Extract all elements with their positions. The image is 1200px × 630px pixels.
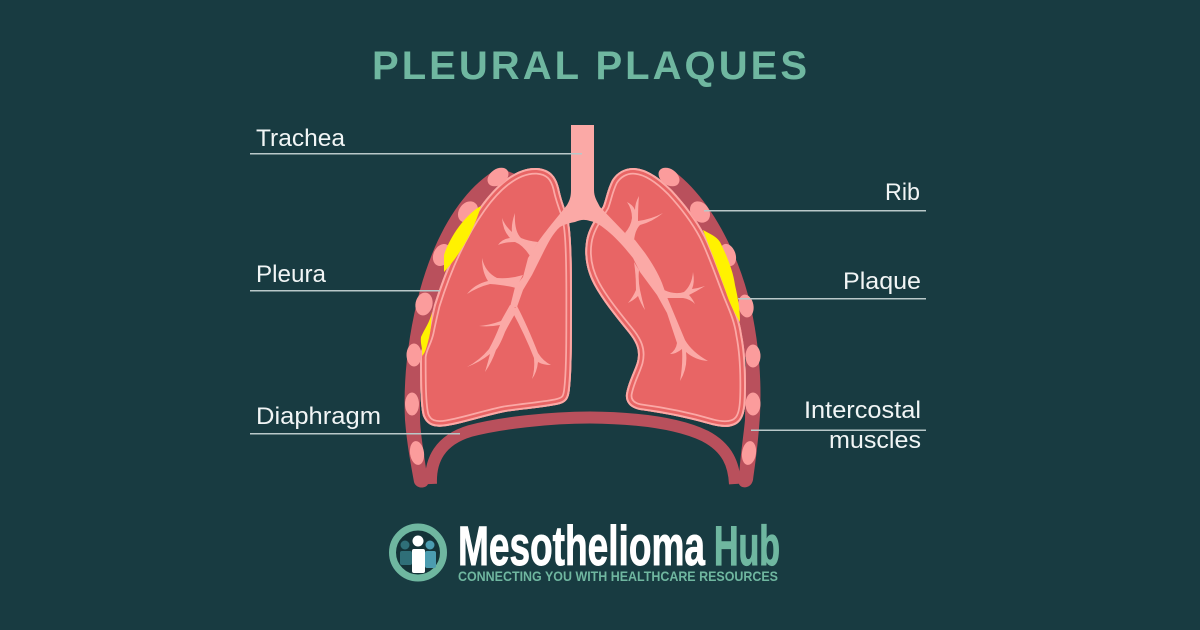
label: Intercostal muscles: Intercostal bbox=[804, 397, 921, 424]
label: Trachea: Trachea bbox=[256, 125, 345, 152]
logo icon bbox=[392, 527, 444, 578]
logo wordmark: Mesothelioma bbox=[458, 514, 706, 577]
left bronchial branches bbox=[467, 213, 551, 379]
label: Intercostal muscles bbox=[751, 397, 926, 454]
pleural plaques bbox=[421, 206, 740, 356]
right ribs bbox=[655, 164, 760, 466]
trachea and main bronchi bbox=[510, 125, 708, 381]
logo bbox=[392, 514, 780, 584]
left chest wall muscle bbox=[405, 170, 520, 488]
left ribs bbox=[405, 164, 512, 466]
label: Rib: Rib bbox=[885, 179, 920, 206]
right bronchial branches bbox=[625, 196, 705, 310]
diaphragm bbox=[431, 418, 735, 484]
label: Plaque: Plaque bbox=[843, 268, 921, 295]
right lung bbox=[585, 168, 746, 427]
logo tagline: CONNECTING YOU WITH HEALTHCARE RESOURCES bbox=[458, 568, 778, 584]
lung diagram bbox=[405, 125, 760, 488]
left lung bbox=[420, 168, 572, 427]
label: Diaphragm: Diaphragm bbox=[256, 403, 381, 430]
logo wordmark hub: Hub bbox=[714, 514, 780, 577]
right chest wall muscle bbox=[660, 172, 760, 487]
label: Intercostal muscles: muscles bbox=[829, 427, 921, 454]
title: PLEURAL PLAQUES bbox=[372, 44, 807, 88]
label: Pleura: Pleura bbox=[256, 261, 326, 288]
